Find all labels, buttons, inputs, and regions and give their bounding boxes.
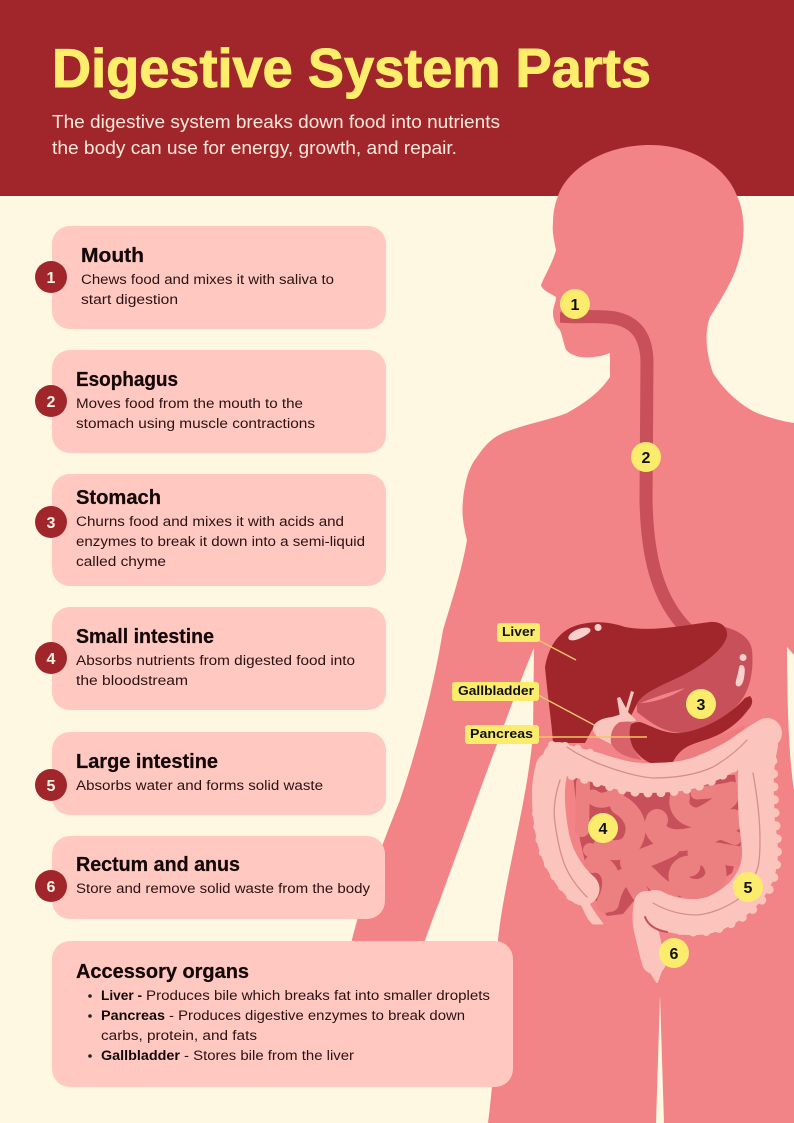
stomach highlight <box>736 654 747 687</box>
badge 3: 3 <box>47 515 56 532</box>
marker 1 <box>560 289 590 319</box>
panel: large intestine <box>35 732 386 815</box>
header band <box>0 0 794 196</box>
badge 3 <box>35 506 67 538</box>
liver <box>545 622 727 743</box>
large intestine <box>537 733 778 982</box>
bullet: gallbladder <box>88 1048 354 1064</box>
transverse colon <box>558 733 767 778</box>
panel: stomach <box>35 474 386 586</box>
bullet: pancreas <box>88 1008 465 1044</box>
badge 2 <box>35 385 67 417</box>
transverse colon scallops <box>560 752 752 793</box>
badge 5: 5 <box>47 778 56 795</box>
pancreas dark lower stomach <box>628 696 752 764</box>
bullet: gallbladder: - Stores bile from the liver <box>184 1048 354 1064</box>
marker 2 <box>631 442 661 472</box>
ascending colon scallops <box>537 775 577 902</box>
bullet: liver: Liver - <box>101 988 142 1004</box>
bullet: pancreas: carbs, protein, and fats <box>101 1028 257 1044</box>
marker 2: 2 <box>642 450 651 467</box>
badge 1: 1 <box>47 270 56 287</box>
badge 1 <box>35 261 67 293</box>
colon tail <box>577 895 603 924</box>
panel: accessory organs <box>52 941 513 1087</box>
description: large intestine: Absorbs water and forms solid waste <box>76 778 323 794</box>
gallbladder and bile duct <box>593 691 636 744</box>
description: esophagus <box>76 396 315 432</box>
panel: esophagus <box>35 350 386 453</box>
liver highlight <box>568 624 602 640</box>
description: small intestine <box>76 653 355 689</box>
badge 2: 2 <box>47 394 56 411</box>
callout: pancreas <box>465 725 647 744</box>
description: stomach: enzymes to break it down into a semi-liquid <box>76 534 365 550</box>
panel: mouth <box>35 226 386 329</box>
badge 6: 6 <box>47 879 56 896</box>
description: small intestine: the bloodstream <box>76 673 188 689</box>
subtitle: the body can use for energy, growth, and repair. <box>52 138 457 158</box>
heading: esophagus: Esophagus <box>76 369 178 391</box>
title: Digestive System Parts <box>52 37 651 99</box>
rectum crease <box>645 917 667 932</box>
badge 4 <box>35 642 67 674</box>
marker 5: 5 <box>744 880 753 897</box>
heading: stomach: Stomach <box>76 487 161 509</box>
stomach pale fold <box>640 688 685 703</box>
description: small intestine: Absorbs nutrients from digested food into <box>76 653 355 669</box>
liver stomach and pancreas group <box>545 622 752 770</box>
bullet: pancreas: - Produces digestive enzymes to break down <box>169 1008 465 1024</box>
badge 5 <box>35 769 67 801</box>
bullet: gallbladder: Gallbladder <box>101 1048 180 1064</box>
description: esophagus: stomach using muscle contractions <box>76 416 315 432</box>
marker 4 <box>588 813 618 843</box>
description: stomach <box>76 514 365 570</box>
marker 5 <box>733 872 763 902</box>
heading: accessory organs: Accessory organs <box>76 961 249 983</box>
marker 1: 1 <box>571 297 580 314</box>
description: mouth: start digestion <box>81 292 178 308</box>
descending colon <box>655 745 760 917</box>
callout: gallbladder <box>452 682 596 726</box>
description: mouth: Chews food and mixes it with saliva to <box>81 272 334 288</box>
colon fold lines <box>554 740 760 915</box>
subtitle: The digestive system breaks down food into nutrients <box>52 112 500 132</box>
stomach <box>637 625 752 733</box>
heading: rectum and anus: Rectum and anus <box>76 854 240 876</box>
bullet: liver: Produces bile which breaks fat into smaller droplets <box>146 988 490 1004</box>
marker 6: 6 <box>670 946 679 963</box>
descending colon scallops <box>660 735 778 932</box>
callout: pancreas: Pancreas <box>470 727 533 741</box>
panel: rectum and anus <box>35 836 385 919</box>
marker 3: 3 <box>697 697 706 714</box>
marker 6 <box>659 938 689 968</box>
badge 4: 4 <box>47 651 56 668</box>
panel: small intestine <box>35 607 386 710</box>
heading: large intestine: Large intestine <box>76 751 218 773</box>
ascending colon <box>548 768 583 889</box>
description: stomach: Churns food and mixes it with acids and <box>76 514 344 530</box>
human body silhouette <box>340 145 794 1123</box>
small intestine <box>573 775 742 916</box>
description: mouth <box>81 272 334 308</box>
subtitle <box>52 112 500 158</box>
bullet: pancreas: Pancreas <box>101 1008 165 1024</box>
heading: mouth: Mouth <box>81 245 144 267</box>
badge 6 <box>35 870 67 902</box>
description: rectum and anus: Store and remove solid waste from the body <box>76 881 371 897</box>
esophagus <box>560 312 690 632</box>
callout: liver: Liver <box>502 625 535 639</box>
description: esophagus: Moves food from the mouth to the <box>76 396 303 412</box>
callout: liver <box>497 623 576 660</box>
marker 3 <box>686 689 716 719</box>
rectum <box>645 903 654 962</box>
pink lower curve <box>672 725 745 770</box>
description: stomach: called chyme <box>76 554 166 570</box>
marker 4: 4 <box>599 821 608 838</box>
duodenum <box>610 720 642 760</box>
heading: small intestine: Small intestine <box>76 626 214 648</box>
callout: gallbladder: Gallbladder <box>458 684 534 698</box>
